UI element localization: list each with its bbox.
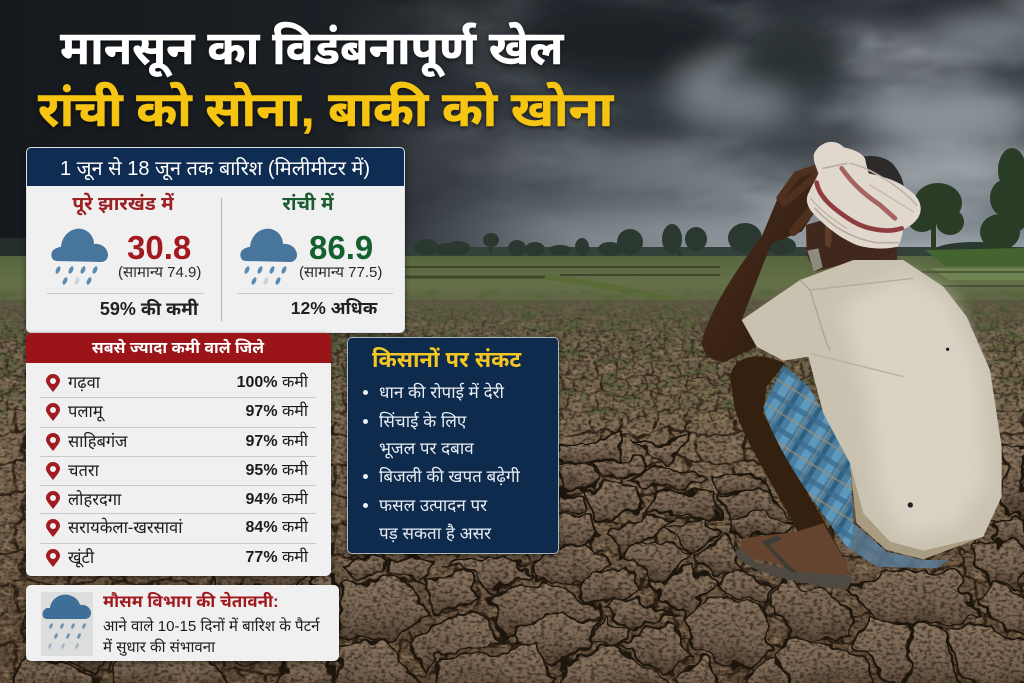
statewide heading: पूरे झारखंड में (72, 194, 174, 215)
row: Garhwa: गढ़वा (68, 374, 100, 392)
statewide rainfall value: 30.8 (127, 229, 191, 266)
bullet: crop yield (363, 496, 492, 543)
icon: map pin (46, 403, 60, 421)
bullet: groundwater pressure: सिंचाई के लिए (379, 412, 466, 431)
bullet: groundwater pressure (363, 412, 474, 458)
foot and sandal (735, 523, 853, 590)
statewide column (47, 192, 204, 319)
row: Lohardaga: 94% कमी (246, 491, 308, 508)
warning text: आने वाले 10-15 दिनों में बारिश के पैटर्न (103, 618, 320, 635)
warning text: में सुधार की संभावना (103, 639, 215, 656)
panel: districts with highest deficit (26, 333, 331, 576)
panel: crisis for farmers (347, 337, 559, 554)
title line 2: रांची को सोना, बाकी को खोना (38, 82, 613, 137)
panel: June rainfall comparison (26, 147, 405, 333)
green field terraces (0, 248, 1024, 316)
icon: rain cloud (51, 228, 108, 285)
turban (807, 142, 921, 248)
bullet list (363, 382, 520, 543)
row: Seraikela-Kharsawan: सरायकेला-खरसावां (68, 519, 182, 537)
soil grain (0, 300, 1024, 683)
panel header (27, 148, 404, 186)
Ranchi surplus: 12% अधिक (291, 298, 377, 318)
statewide deficit: 59% की कमी (100, 299, 198, 319)
row: Seraikela-Kharsawan (40, 514, 316, 544)
row: Lohardaga: लोहरदगा (68, 491, 121, 509)
row: Sahibganj: साहिबगंज (68, 433, 127, 451)
sky (0, 0, 1024, 262)
panel header: सबसे ज्यादा कमी वाले जिले (92, 340, 264, 357)
bullet: crop yield: फसल उत्पादन पर (379, 496, 487, 515)
bullet: delayed transplanting: धान की रोपाई में देरी (379, 383, 504, 402)
row: Palamu: पलामू (68, 403, 103, 421)
rear leg and thigh (730, 356, 847, 577)
Ranchi column (237, 192, 393, 318)
raised arm and hand (701, 167, 821, 363)
warning text (103, 617, 320, 656)
row: Sahibganj (40, 428, 316, 457)
icon: map pin (46, 433, 60, 451)
icon: map pin (46, 462, 60, 480)
row: Khunti (46, 548, 308, 568)
bullet: power consumption: बिजली की खपत बढ़ेगी (379, 467, 520, 486)
row: Seraikela-Kharsawan: 84% कमी (246, 519, 308, 536)
rule (47, 293, 204, 294)
row: Khunti: 77% कमी (246, 549, 308, 566)
row: Lohardaga (40, 486, 316, 514)
panel header (26, 333, 331, 363)
title line 1: मानसून का विडंबनापूर्ण खेल (60, 22, 563, 74)
title (38, 22, 616, 137)
rule (237, 293, 393, 294)
row: Sahibganj: 97% कमी (246, 433, 308, 450)
foreground dried mud plates (8, 440, 1024, 683)
row: Chatra (40, 457, 316, 486)
bullet: crop yield: पड़ सकता है असर (379, 524, 491, 543)
row: Garhwa: 100% कमी (237, 374, 308, 391)
white shirt (742, 260, 1002, 559)
Ranchi rainfall value: 86.9 (309, 229, 373, 266)
hair (862, 156, 904, 188)
panel heading: किसानों पर संकट (372, 347, 521, 372)
icon: rain cloud tile (41, 592, 93, 656)
icon: map pin (46, 549, 60, 567)
panel: weather department warning (26, 585, 339, 661)
statewide normal value: (सामान्य 74.9) (118, 264, 201, 281)
cracked soil (0, 290, 1024, 683)
icon: map pin (46, 374, 60, 392)
row: Palamu: 97% कमी (246, 403, 308, 420)
row: Chatra: चतरा (68, 462, 99, 480)
warning heading: मौसम विभाग की चेतावनी: (103, 592, 279, 611)
bullet: groundwater pressure: भूजल पर दबाव (379, 439, 474, 458)
icon: rain cloud (240, 228, 297, 285)
head, ear and grey beard (806, 220, 897, 272)
icon: map pin (46, 491, 60, 509)
row: Garhwa (40, 369, 316, 398)
panel header: 1 जून से 18 जून तक बारिश (मिलीमीटर में) (60, 158, 370, 180)
row: Palamu (40, 398, 316, 428)
farmer squatting with hand on head (701, 142, 1002, 590)
row: Chatra: 95% कमी (246, 462, 308, 479)
checked lungi (763, 365, 948, 568)
divider (221, 198, 222, 321)
icon: map pin (46, 519, 60, 537)
Ranchi heading: रांची में (282, 194, 334, 215)
Ranchi normal value: (सामान्य 77.5) (299, 264, 382, 281)
distant tree line (0, 148, 1024, 258)
row: Khunti: खूंटी (68, 549, 94, 567)
